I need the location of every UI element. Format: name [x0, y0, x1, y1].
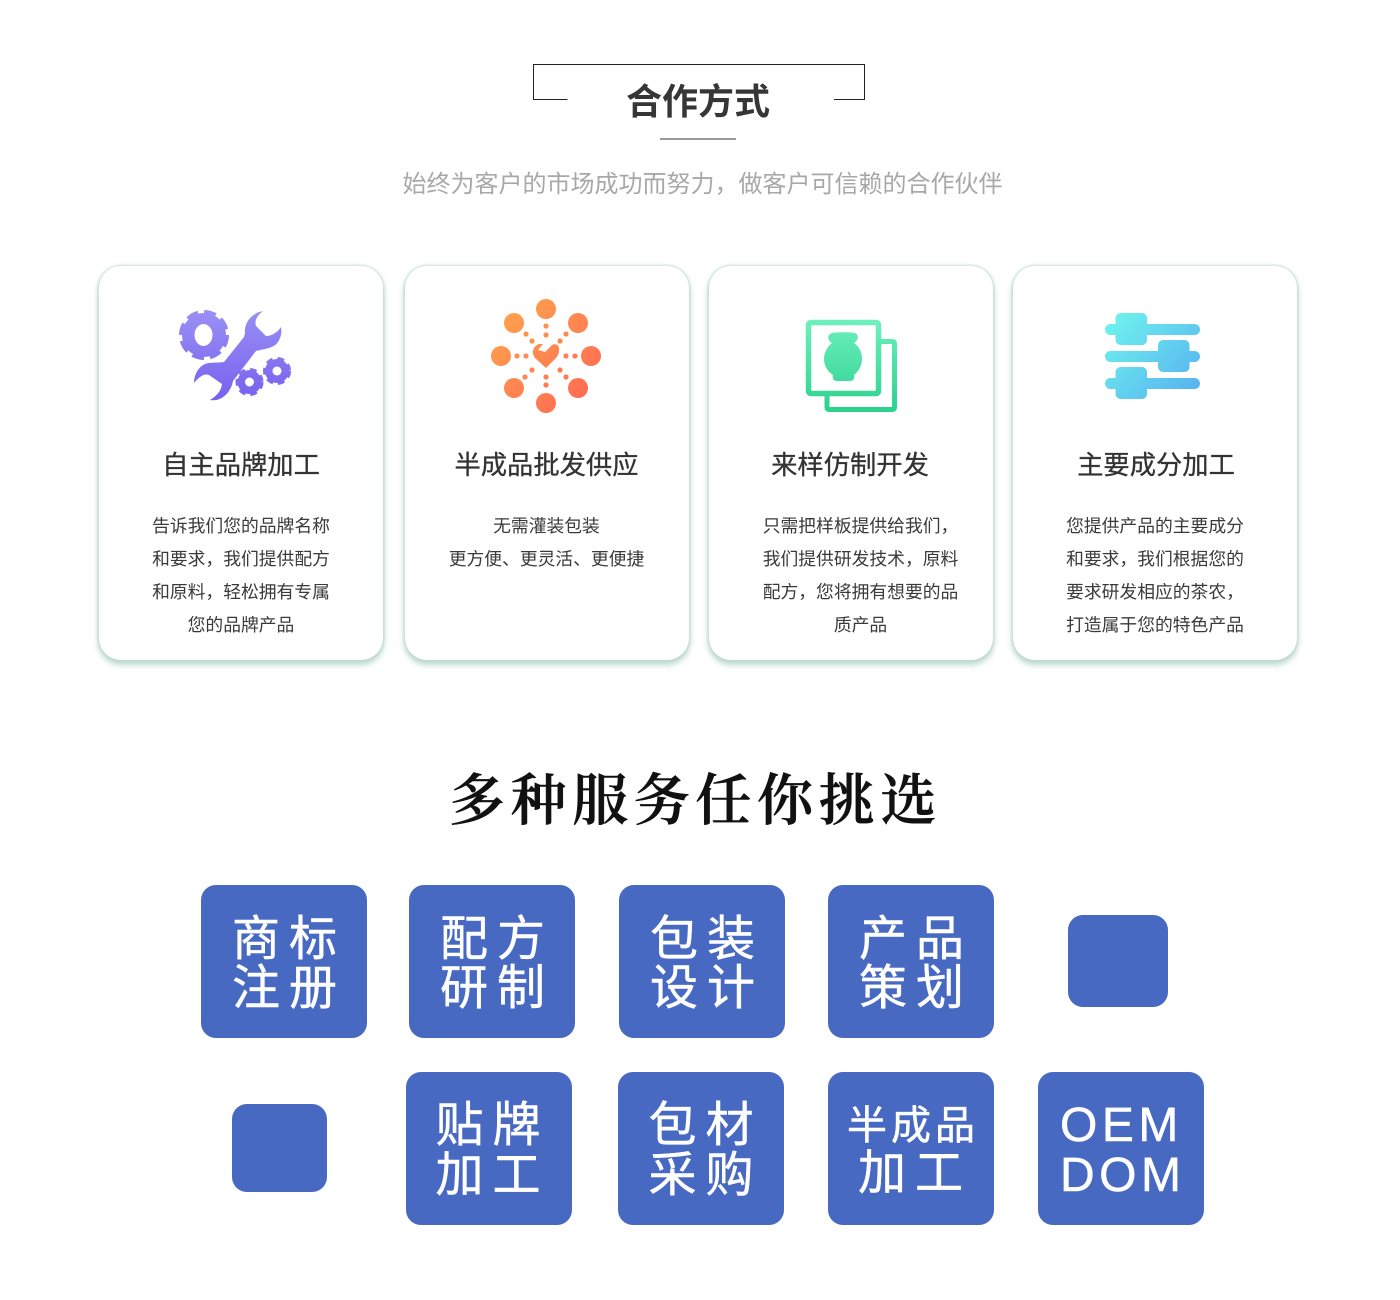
card text: 打造属于您的特色产品 [1066, 615, 1244, 635]
service tile: 贴牌加工: 加工 [436, 1148, 550, 1202]
service tile: 包材采购: 包材 [648, 1098, 763, 1152]
service tile: OEM DOM: DOM [1060, 1148, 1185, 1202]
service tile: 商标注册 [201, 885, 367, 1038]
card text: 质产品 [834, 615, 887, 635]
service tile: 配方研制: 研制 [440, 962, 554, 1015]
card text [152, 516, 330, 635]
icon: green sample frames with vase [806, 320, 897, 412]
service tile: 贴牌加工 [406, 1072, 572, 1225]
service tile: 产品策划: 产品 [859, 913, 973, 966]
card text: 配方，您将拥有想要的品 [763, 582, 958, 602]
icon: orange burst heart [491, 299, 601, 413]
service tile: 包材采购 [618, 1072, 784, 1225]
service tile: 包装设计: 包装 [650, 913, 764, 966]
service tile: 包装设计: 设计 [650, 962, 764, 1015]
icon: blue sliders [1105, 313, 1200, 399]
card text: 和原料，轻松拥有专属 [152, 582, 330, 602]
title: 合作方式 [626, 81, 770, 122]
card text: 您的品牌产品 [188, 615, 294, 635]
card text [763, 516, 958, 635]
service tile: 配方研制 [409, 885, 575, 1038]
card heading: 半成品批发供应 [454, 450, 639, 480]
card text: 告诉我们您的品牌名称 [152, 516, 330, 536]
service tile: 产品策划: 策划 [859, 962, 973, 1015]
card text: 和要求，我们根据您的 [1066, 549, 1244, 569]
card text: 更方便、更灵活、更便捷 [449, 549, 644, 569]
card text: 您提供产品的主要成分 [1066, 516, 1244, 536]
card text [449, 516, 644, 569]
panel: 来样仿制开发 [709, 266, 993, 660]
service tile: 配方研制: 配方 [440, 913, 554, 966]
icon: wrench and gears [179, 310, 291, 400]
panel: 半成品批发供应 [405, 266, 689, 660]
subtitle: 始终为客户的市场成功而努力，做客户可信赖的合作伙伴 [402, 171, 1002, 198]
card text [1066, 516, 1244, 635]
card text: 要求研发相应的茶农， [1066, 582, 1244, 602]
service tile: 半成品加工 [828, 1072, 994, 1225]
service tile: 半成品加工: 半成品 [847, 1104, 979, 1148]
card heading: 自主品牌加工 [162, 450, 320, 480]
service tile: 商标注册: 商标 [232, 913, 346, 966]
card heading: 来样仿制开发 [771, 450, 929, 480]
title frame [533, 64, 865, 100]
card text: 无需灌装包装 [493, 516, 600, 536]
section heading: 多种服务任你挑选 [449, 771, 942, 833]
service tile: 产品策划 [828, 885, 994, 1038]
panel: 自主品牌加工 [99, 266, 383, 660]
title underline [660, 138, 736, 140]
card heading: 主要成分加工 [1077, 450, 1235, 480]
panel: 主要成分加工 [1013, 266, 1297, 660]
blank tile left [232, 1104, 327, 1192]
service tile: OEM DOM: OEM [1060, 1098, 1183, 1152]
service tile: 半成品加工: 加工 [858, 1147, 972, 1200]
service tile: 包装设计 [619, 885, 785, 1038]
service tile: 商标注册: 注册 [232, 962, 346, 1015]
service tile: 贴牌加工: 贴牌 [436, 1098, 550, 1152]
card text: 我们提供研发技术，原料 [763, 549, 958, 569]
card text: 只需把样板提供给我们， [763, 516, 958, 536]
service tile: 包材采购: 采购 [648, 1148, 763, 1202]
card text: 和要求，我们提供配方 [152, 549, 330, 569]
service tile: OEM DOM [1038, 1072, 1204, 1225]
blank tile right [1068, 915, 1168, 1007]
